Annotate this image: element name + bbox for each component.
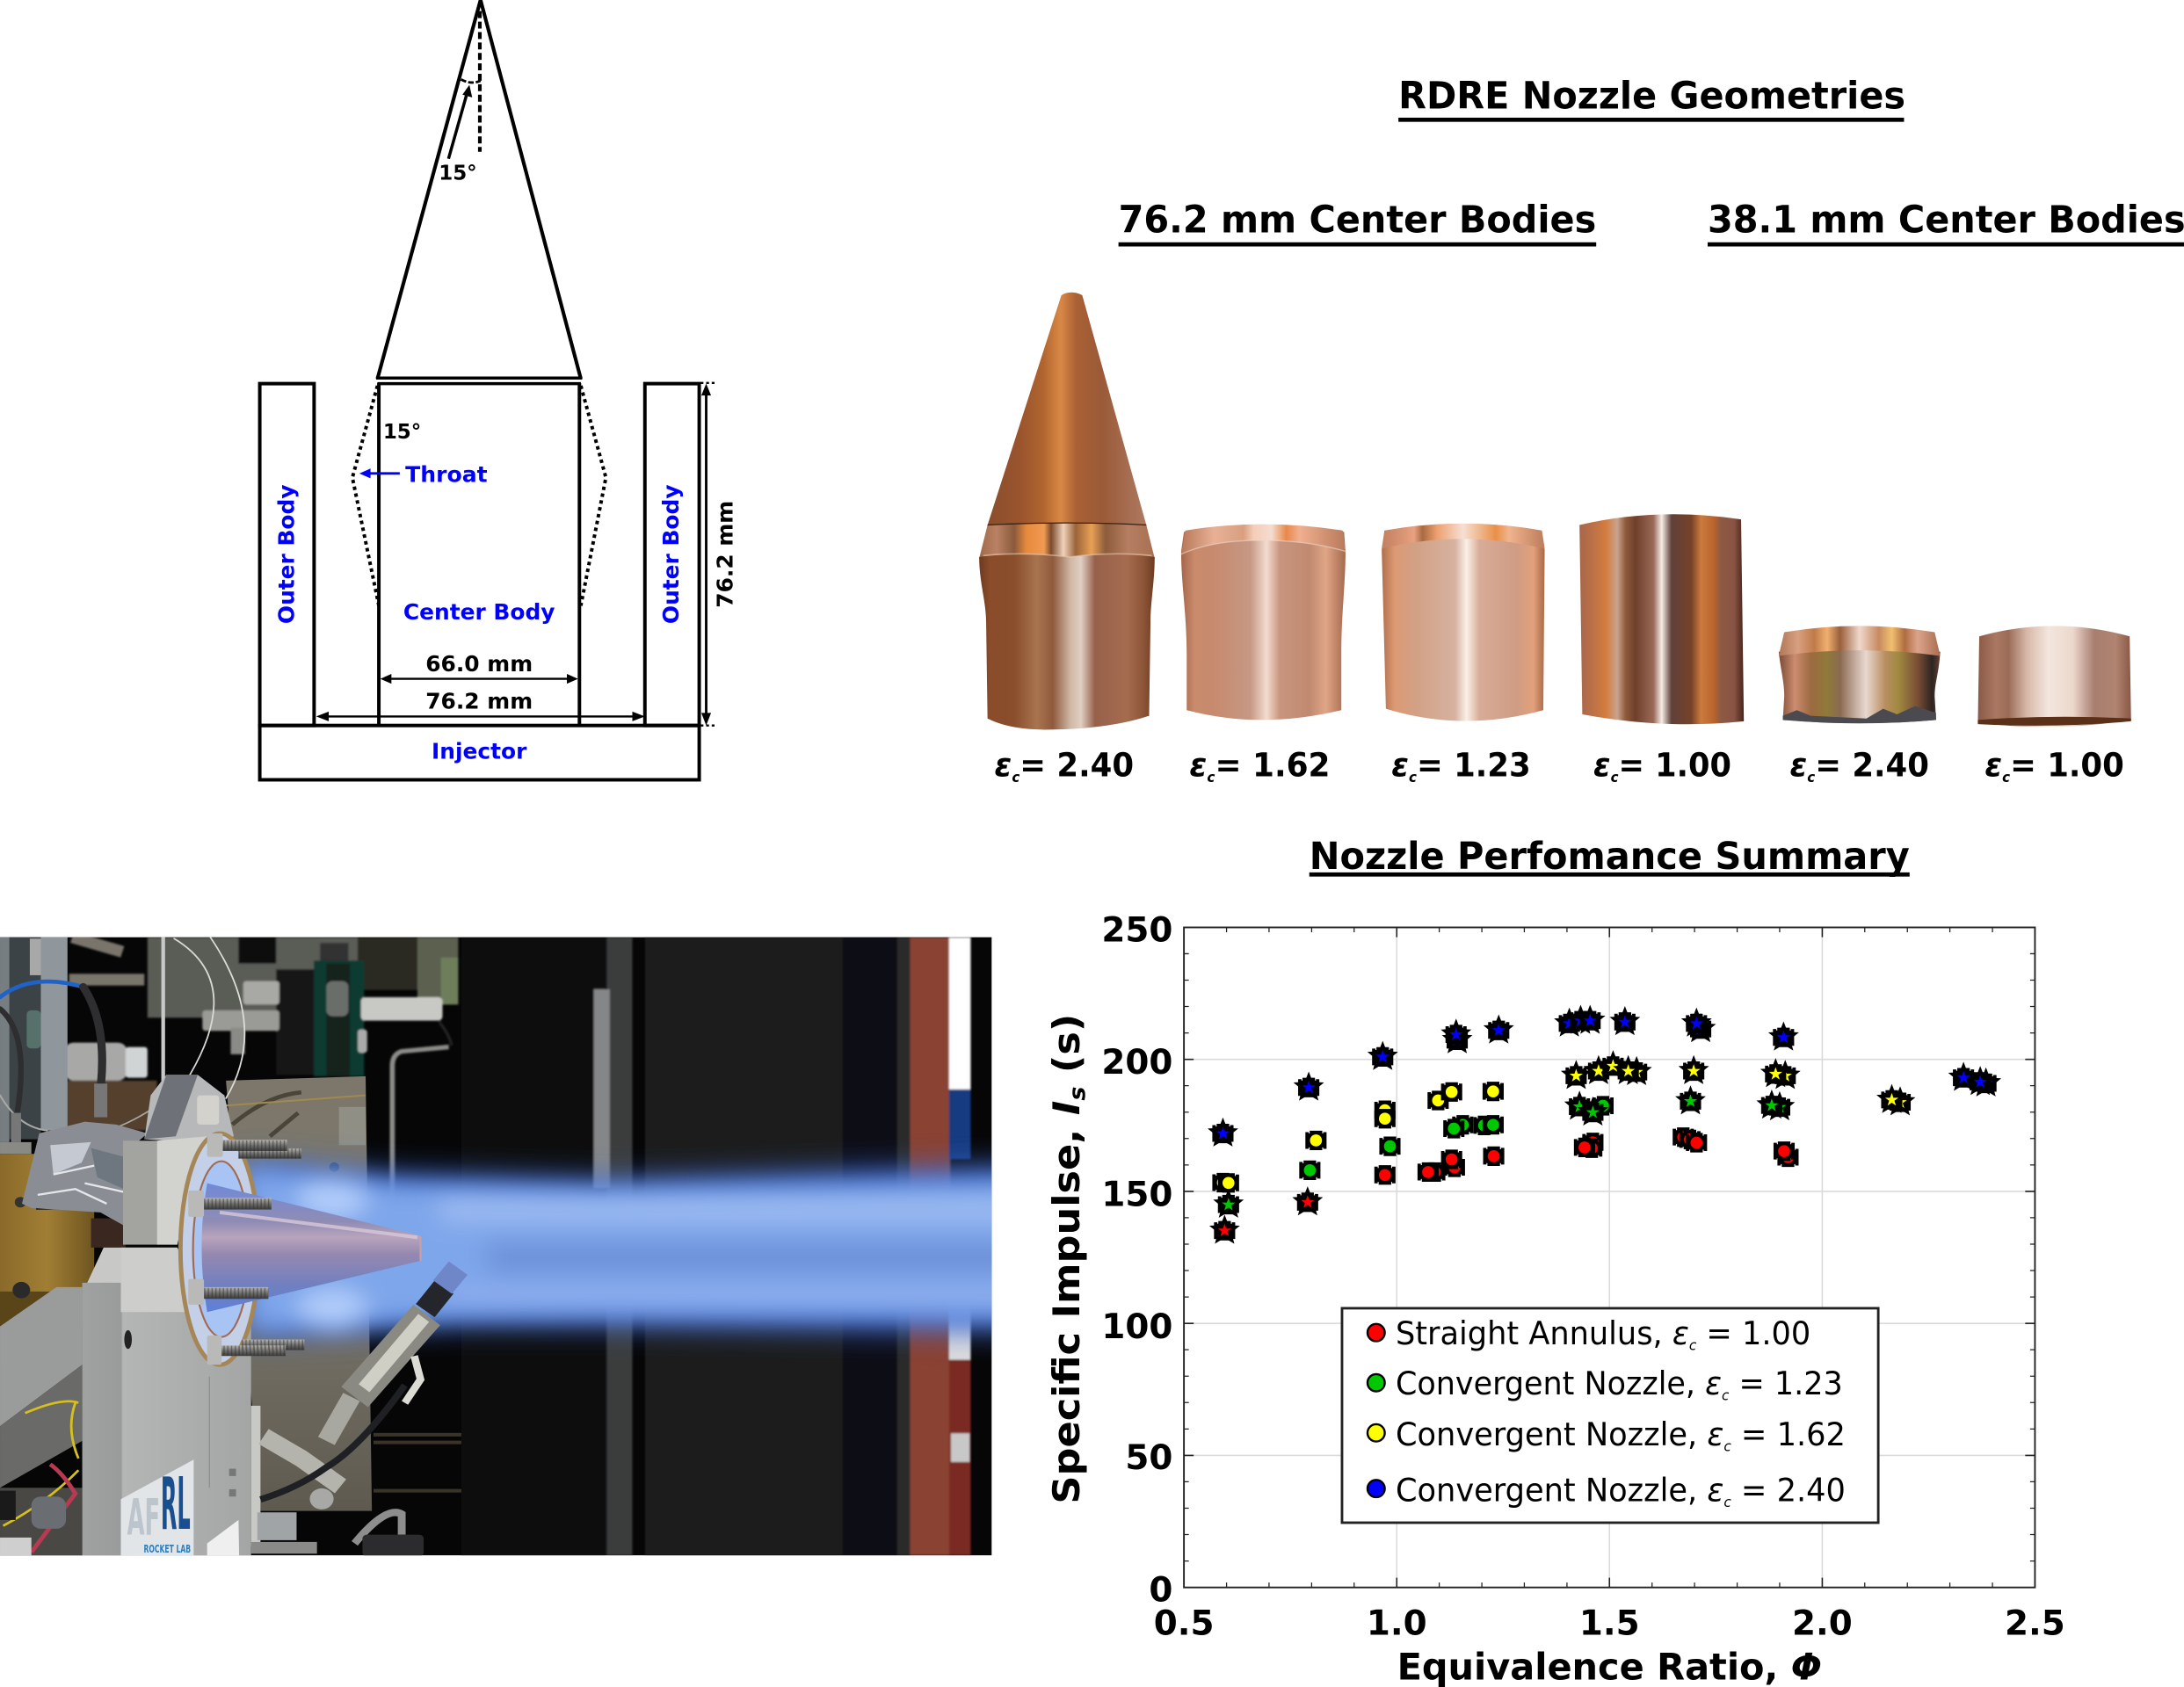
arrow to cone angle [448, 85, 472, 159]
label: ec 1.00 (76.2 mm): = 1.00 [1618, 746, 1731, 785]
x axis tick labels: 1.5 [1579, 1604, 1640, 1644]
legend box [1342, 1308, 1878, 1523]
15 degree arc mark [461, 79, 481, 83]
x axis title: Equivalence Ratio, Φ [1397, 1645, 1822, 1687]
nozzle photo: 76.2 mm ec 1.00 [1579, 514, 1744, 724]
chart: specific impulse vs equivalence ratio [1045, 910, 2065, 1687]
AFRL logo sticker: ROCKET LAB [144, 1544, 191, 1556]
label: 76.2 mm horizontal: 76.2 mm [425, 689, 533, 714]
label: ec 1.00 (76.2 mm): ε [1593, 746, 1611, 785]
label: right outer body: Outer Body [658, 484, 684, 624]
label: throat angle: 15° [383, 421, 421, 444]
series: ec 1.62 circles [1214, 1083, 1502, 1191]
label: ec 1.00 (38.1 mm): c [2002, 769, 2011, 786]
series: ec 1.23 circles [1301, 1097, 1612, 1178]
nozzle photo: 76.2 mm ec 1.62 [1181, 525, 1346, 720]
label: ec 2.40 (38.1 mm): ε [1789, 746, 1807, 785]
label: ec 2.40 (76.2 mm): = 2.40 [1019, 746, 1134, 785]
nozzle photo: 76.2 mm cone, ec 2.40 [979, 293, 1155, 729]
center body rectangle [379, 383, 579, 726]
label: 66.0 mm: 66.0 mm [425, 651, 533, 677]
left outer body rectangle [260, 384, 314, 726]
AFRL logo sticker [120, 1459, 193, 1556]
heading: 76.2 mm Center Bodies: 76.2 mm Center Bodies [1119, 199, 1596, 243]
y axis tick labels: 100 [1101, 1307, 1172, 1347]
legend entry: straight annulus: Straight Annulus, ε [1396, 1314, 1690, 1352]
series: yellow stars [1561, 1050, 1915, 1115]
axis frame and ticks [1184, 927, 2035, 1588]
label: ec 1.23: c [1409, 769, 1418, 786]
x axis tick labels [1154, 1604, 2065, 1644]
x axis tick labels: 1.0 [1367, 1604, 1427, 1644]
label: throat: Throat [405, 461, 488, 487]
y axis tick labels [1101, 910, 1172, 1611]
panel: photo of engine firing with blue plume: RL [161, 1462, 191, 1546]
label: ec 2.40 (76.2 mm): ε [995, 746, 1012, 785]
label: ec 2.40 (38.1 mm): = 2.40 [1815, 746, 1929, 785]
label: ec 1.62: ε [1189, 746, 1207, 785]
heading: RDRE Nozzle Geometries: RDRE Nozzle Geometries [1398, 75, 1905, 119]
throat arrow [359, 468, 400, 478]
y axis title: s [1064, 1087, 1091, 1101]
legend entry: ec 2.40: = 2.40 [1731, 1471, 1846, 1509]
legend entry: ec 1.23: = 1.23 [1729, 1365, 1843, 1402]
y axis tick labels: 50 [1125, 1438, 1172, 1478]
legend entry: ec 1.62: c [1723, 1437, 1731, 1454]
label: ec 1.62: = 1.62 [1215, 746, 1331, 785]
series: straight annulus circles [1376, 1129, 1797, 1184]
right dotted throat contour [581, 386, 606, 605]
nozzle photo: 38.1 mm ec 2.40 [1779, 626, 1941, 723]
label: ec 1.00 (76.2 mm): c [1611, 769, 1619, 786]
label: cone angle: 15° [439, 162, 477, 185]
legend entry: ec 1.23: c [1722, 1387, 1730, 1404]
cone spike outline [377, 0, 581, 379]
legend entry: ec 1.62: = 1.62 [1731, 1415, 1846, 1453]
dimension arrow 76.2 mm horizontal [316, 712, 645, 721]
left dotted throat contour [352, 386, 379, 605]
cone base plate lines [376, 378, 582, 384]
label: ec 1.62: c [1207, 769, 1215, 786]
dimension arrow 76.2 mm vertical [700, 383, 716, 726]
panel: nozzle schematic diagram [260, 0, 738, 779]
label: center body: Center Body [403, 599, 555, 625]
nozzle photo: 38.1 mm ec 1.00 [1977, 626, 2131, 727]
legend entry: ec 1.23 [1368, 1365, 1843, 1404]
label: left outer body: Outer Body [273, 484, 299, 624]
label: ec 1.00 (38.1 mm): ε [1984, 746, 2002, 785]
y axis tick labels: 250 [1101, 910, 1172, 950]
nozzle photo: 76.2 mm ec 1.23 [1382, 524, 1545, 721]
series: red stars [1209, 1186, 1323, 1244]
label: injector: Injector [432, 739, 527, 764]
legend entry: ec 2.40 [1368, 1471, 1846, 1510]
legend entry: straight annulus: = 1.00 [1696, 1314, 1810, 1352]
injector rectangle [260, 726, 700, 779]
panel: photo of engine firing with blue plume [0, 937, 991, 1556]
legend entry: ec 1.62: Convergent Nozzle, ε [1396, 1415, 1724, 1453]
legend entry: ec 2.40: Convergent Nozzle, ε [1396, 1471, 1724, 1509]
legend entry: ec 1.62 [1368, 1415, 1846, 1454]
label: ec 1.23: = 1.23 [1417, 746, 1531, 785]
legend entry: straight annulus [1368, 1314, 1810, 1353]
label: ec 1.23: ε [1391, 746, 1409, 785]
y axis tick labels: 200 [1101, 1043, 1172, 1082]
x axis tick labels: 2.5 [2005, 1604, 2065, 1644]
legend entry: straight annulus: c [1689, 1336, 1697, 1353]
right outer body rectangle [645, 384, 700, 726]
y axis tick labels: 0 [1149, 1571, 1172, 1611]
series: blue stars [1208, 1004, 2001, 1147]
label: ec 1.00 (38.1 mm): = 1.00 [2010, 746, 2124, 785]
label: ec 2.40 (38.1 mm): c [1807, 769, 1816, 786]
heading: Nozzle Perfomance Summary: Nozzle Perfomance Summary [1310, 835, 1910, 879]
legend entry: ec 2.40: c [1723, 1494, 1731, 1510]
legend entry: ec 1.23: Convergent Nozzle, ε [1396, 1365, 1723, 1402]
label: ec 2.40 (76.2 mm): c [1012, 769, 1020, 786]
plot background and gridlines [1184, 927, 2035, 1588]
x axis tick labels: 0.5 [1154, 1604, 1214, 1644]
x axis tick labels: 2.0 [1792, 1604, 1853, 1644]
AFRL logo sticker: AF [127, 1488, 160, 1546]
y axis title: (s) [1045, 1014, 1088, 1087]
series: green stars [1213, 1085, 1795, 1218]
dimension arrow 66.0 mm [381, 674, 578, 684]
label: 76.2 mm vertical: 76.2 mm [713, 501, 738, 608]
y axis title: Specific Impulse, I [1045, 1102, 1088, 1504]
cone centre dashed axis [479, 11, 481, 152]
y axis tick labels: 150 [1101, 1175, 1172, 1214]
